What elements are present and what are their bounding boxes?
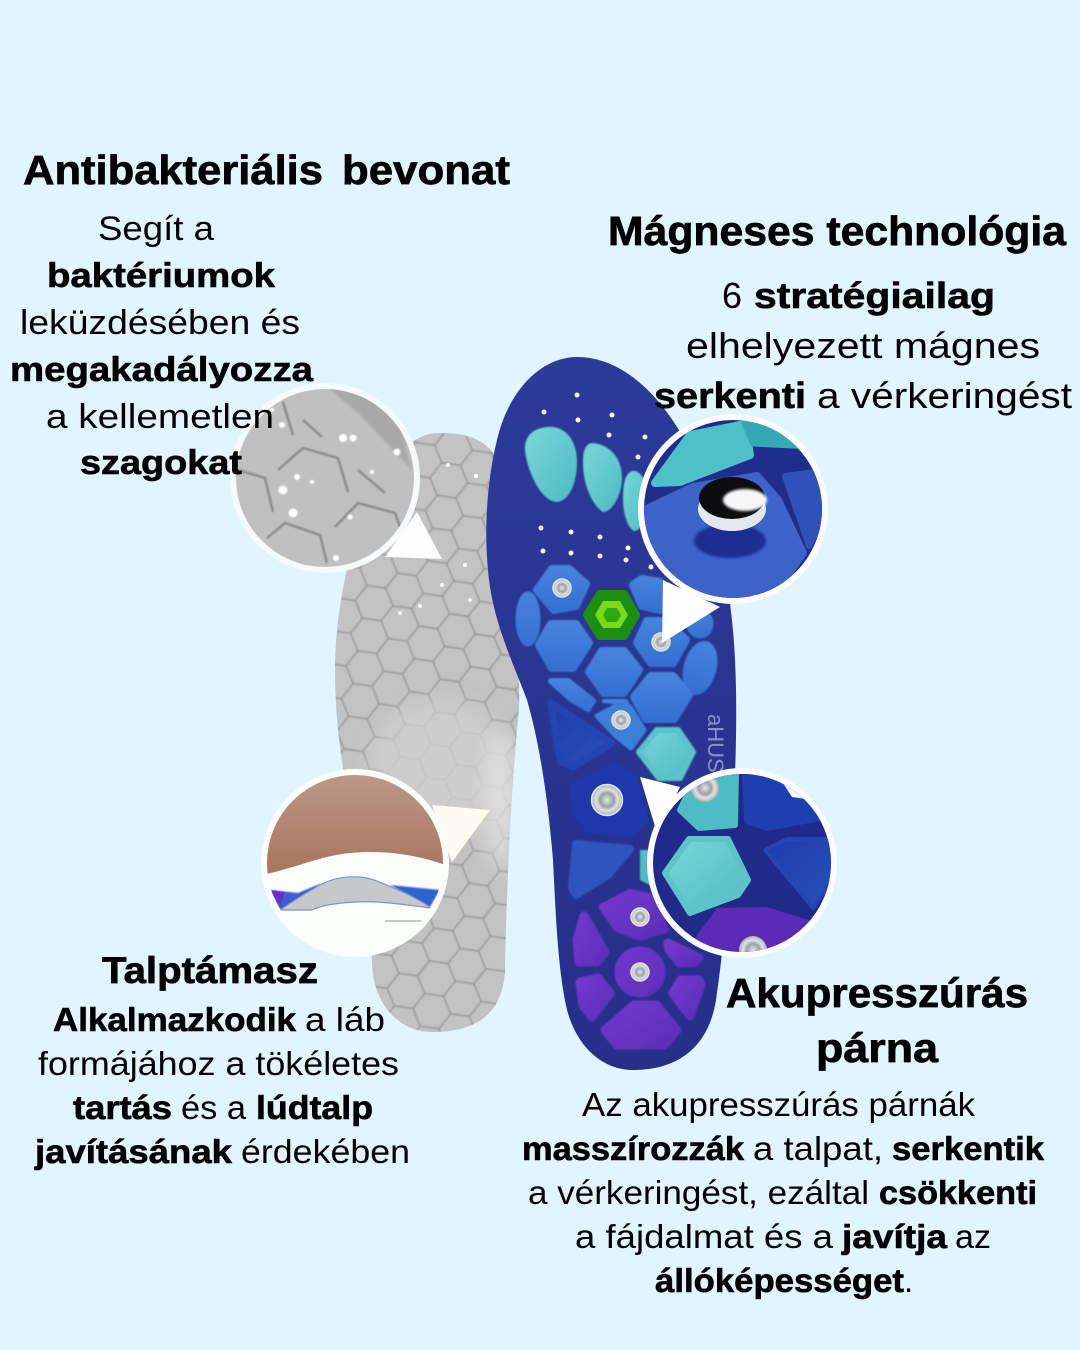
panel: antibacterial coating text [10, 147, 510, 482]
text block: arch support description [34, 1001, 410, 1170]
text block: magnetic description: 6 [722, 275, 742, 316]
grey insole underside [330, 430, 520, 1040]
heading: acupressure pad [726, 970, 1028, 1071]
brand mark: aHUS [703, 714, 728, 773]
callout: magnet zoom [638, 414, 830, 643]
text block: antibacterial description: leküzdésében és [20, 304, 300, 342]
text block: antibacterial description: baktériumok [47, 257, 275, 295]
green logo hex [587, 594, 636, 636]
text block: magnetic description [654, 275, 1072, 416]
text block: acupressure description: a talpat, [753, 1130, 883, 1167]
text block: arch support description: a láb [305, 1001, 385, 1038]
text block: antibacterial description: Segít a [98, 210, 214, 248]
text block: arch support description: Alkalmazkodik [53, 1001, 297, 1038]
panel: magnetic technology text [608, 208, 1072, 416]
midfoot and teal pads [551, 703, 693, 895]
text block: acupressure description: csökkenti [879, 1174, 1037, 1211]
text block: antibacterial description: megakadályozza [10, 351, 314, 389]
text block: arch support description: tartás [73, 1089, 172, 1126]
heading: magnetic technology: Mágneses technológia [608, 208, 1067, 254]
blue insole top [486, 357, 736, 1070]
heading: acupressure pad: Akupresszúrás [726, 970, 1028, 1016]
callout: acupressure zoom [640, 768, 840, 964]
heading: acupressure pad: párna [816, 1025, 939, 1071]
text block: acupressure description: a fájdalmat és a [575, 1218, 834, 1255]
heading: antibacterial coating [23, 147, 510, 193]
text block: acupressure description: állóképességet [655, 1262, 904, 1299]
callout: antibacterial coating zoom [230, 383, 442, 575]
text block: acupressure description: serkentik [892, 1130, 1045, 1167]
text block: acupressure description [522, 1086, 1045, 1299]
text block: antibacterial description: szagokat [80, 444, 242, 482]
heading: antibacterial coating: Antibakteriális [23, 147, 323, 193]
dots [538, 392, 654, 570]
text block: magnetic description: serkenti [654, 375, 806, 416]
heading: antibacterial coating: bevonat [342, 147, 510, 193]
panel: acupressure pad text [522, 970, 1045, 1299]
text block: acupressure description: az [955, 1218, 991, 1255]
text block: acupressure description: masszírozzák [522, 1130, 745, 1167]
text block: magnetic description: elhelyezett mágnes [686, 325, 1040, 366]
purple heel pads [577, 893, 701, 1045]
text block: arch support description: lúdtalp [256, 1089, 373, 1126]
text block: antibacterial description: a kellemetlen [46, 398, 274, 436]
magnets [553, 579, 670, 981]
text block: magnetic description: stratégiailag [754, 275, 995, 316]
text block: acupressure description: javítja [841, 1218, 948, 1255]
text block: acupressure description: a vérkeringést, ezáltal [528, 1174, 869, 1211]
text block: acupressure description: Az akupresszúrás párnák [582, 1086, 976, 1123]
text block: arch support description: érdekében [241, 1133, 410, 1170]
text block: arch support description: javításának [34, 1133, 233, 1170]
text block: arch support description: és a [181, 1089, 247, 1126]
callout: arch support zoom [261, 769, 490, 957]
text block: antibacterial description [10, 210, 314, 482]
text block: acupressure description: . [904, 1262, 913, 1299]
text block: magnetic description: a vérkeringést [817, 375, 1072, 416]
toe pads [525, 427, 648, 531]
blue forefoot pads [516, 569, 722, 748]
text block: arch support description: formájához a tökéletes [38, 1045, 399, 1082]
panel: arch support text [34, 950, 410, 1170]
heading: arch support: Talptámasz [102, 950, 318, 991]
